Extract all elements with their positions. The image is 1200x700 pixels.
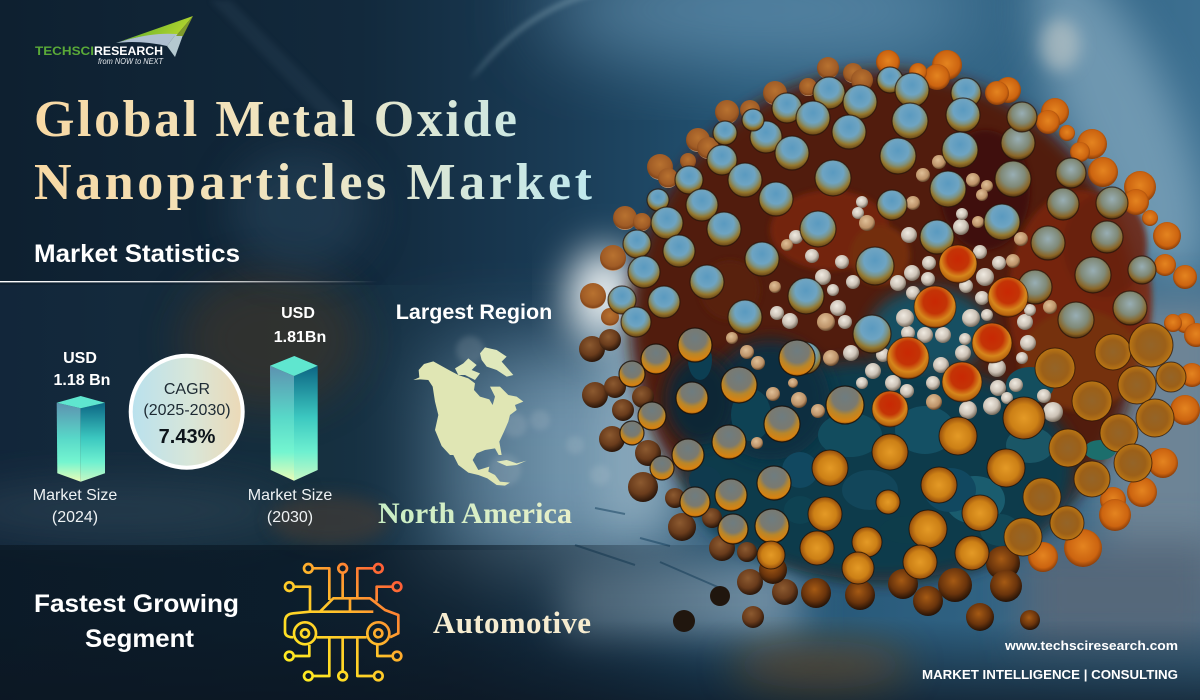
CAGR badge: (2025-2030) [143, 402, 231, 419]
website url: www.techsciresearch.com [1004, 638, 1178, 653]
label: automotive: Automotive [433, 605, 591, 640]
red-orange spheres [872, 245, 1028, 427]
tagline: MARKET INTELLIGENCE | CONSULTING [922, 667, 1178, 682]
bar: market size 2030 [270, 356, 318, 481]
label: 2030 market size: (2030) [267, 509, 313, 526]
title [34, 91, 593, 211]
title: Nanoparticles Market [34, 154, 593, 211]
base: teal lumps [665, 288, 1116, 580]
icon: connected car [285, 564, 401, 680]
base: copper core [630, 70, 1140, 580]
map: north america [413, 347, 527, 486]
title: Global Metal Oxide [34, 91, 517, 148]
logo wordmark: TECHSCI [35, 44, 94, 58]
logo tagline: from NOW to NEXT [98, 57, 164, 66]
heading: fastest growing segment [34, 590, 239, 653]
heading: market statistics: Market Statistics [34, 240, 240, 268]
bottom band overlay [0, 545, 1200, 700]
logo: RESEARCH [94, 44, 163, 58]
label: 2024 value: 1.18 Bn [54, 372, 110, 389]
nanoparticle sphere [579, 50, 1200, 632]
blue silver spheres [608, 67, 1020, 374]
label: 2024 value: USD [63, 350, 97, 367]
speckled silver spheres [995, 102, 1156, 338]
heading: largest region: Largest Region [396, 300, 552, 324]
heading: fastest growing segment: Segment [85, 625, 195, 653]
bar: market size 2024 [57, 396, 105, 482]
label: 2024 market size: Market Size [33, 487, 117, 504]
label: 2030 market size: Market Size [248, 487, 332, 504]
dark brown particles lower left [579, 329, 798, 632]
orange outer particles right [876, 50, 1200, 572]
speckled copper-gold spheres [1004, 323, 1186, 556]
CAGR badge: CAGR [164, 381, 210, 398]
logo arrow mark [116, 16, 193, 57]
base: copper highlights [700, 130, 1152, 410]
label: 2030 value: USD [281, 305, 315, 322]
label: 2030 market size [248, 487, 332, 526]
label: 2030 value: 1.81Bn [274, 329, 326, 346]
label: 2024 market size [33, 487, 117, 526]
label: north america: North America [378, 497, 572, 530]
label: 2024 market size: (2024) [52, 509, 98, 526]
bright gold spheres [757, 397, 1045, 584]
label: 2030 value [274, 305, 326, 346]
small white and tan beads [770, 196, 1063, 422]
outer brown particles [580, 57, 873, 326]
label: 2024 value [54, 350, 110, 389]
CAGR badge [131, 356, 243, 468]
dark gold lower particles [759, 546, 1040, 631]
CAGR badge: 7.43% [159, 426, 216, 448]
logo [35, 16, 193, 66]
grey-gold spheres [619, 328, 864, 544]
heading: fastest growing segment: Fastest Growing [34, 590, 239, 618]
tan beads [726, 155, 1057, 449]
